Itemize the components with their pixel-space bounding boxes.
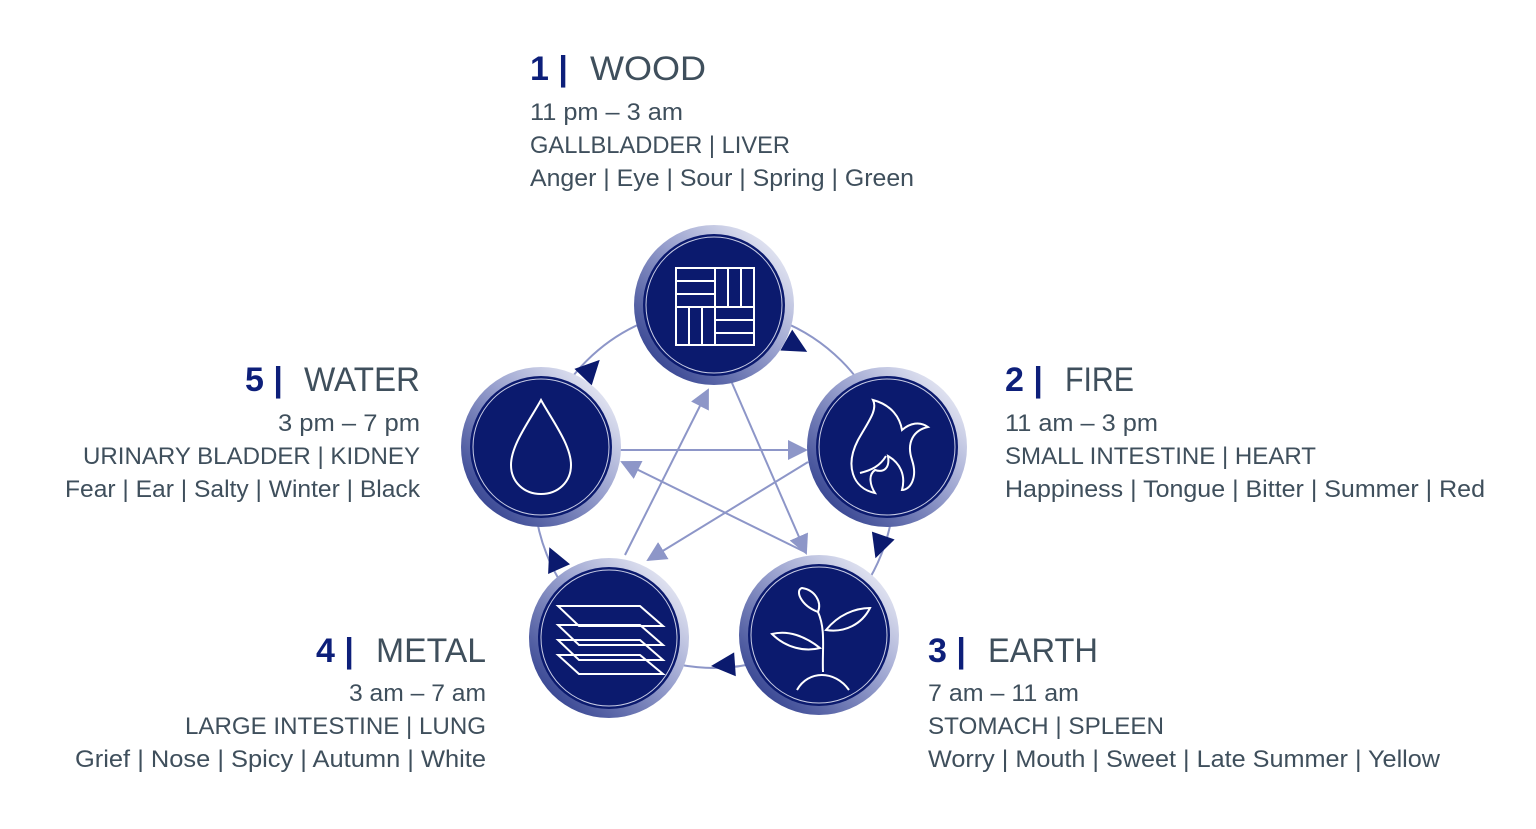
text: fire: 2 | <box>1005 361 1043 399</box>
text: metal <box>75 632 486 773</box>
text: water: 5 | <box>245 361 283 399</box>
text: wood: 1 | <box>530 50 568 88</box>
node: wood <box>634 225 794 385</box>
text: earth: 7 am – 11 am <box>928 680 1079 707</box>
text: metal: 4 | <box>316 632 354 670</box>
text: wood: Anger | Eye | Sour | Spring | Green <box>530 165 914 192</box>
node: earth <box>739 555 899 715</box>
text: metal: Grief | Nose | Spicy | Autumn | White <box>75 746 486 773</box>
node: water <box>461 367 621 527</box>
text: wood: 11 pm – 3 am <box>530 99 683 126</box>
star arrows <box>620 360 808 560</box>
text: earth: Worry | Mouth | Sweet | Late Summer | Yellow <box>928 746 1441 773</box>
text: earth: STOMACH | SPLEEN <box>928 713 1164 740</box>
text: fire: FIRE <box>1065 361 1134 399</box>
node: metal <box>529 558 689 718</box>
text: metal: 3 am – 7 am <box>349 680 486 707</box>
node: fire <box>807 367 967 527</box>
text: earth: 3 | <box>928 632 966 670</box>
text: water: WATER <box>304 361 420 399</box>
text: water: URINARY BLADDER | KIDNEY <box>83 443 420 470</box>
text: wood <box>530 50 914 192</box>
text: metal: METAL <box>376 632 486 670</box>
text: water: Fear | Ear | Salty | Winter | Black <box>65 476 421 503</box>
text: earth <box>928 632 1441 773</box>
text: fire: Happiness | Tongue | Bitter | Summer | Red <box>1005 476 1485 503</box>
text: fire <box>1005 361 1485 503</box>
text: metal: LARGE INTESTINE | LUNG <box>185 713 486 740</box>
text: water: 3 pm – 7 pm <box>278 410 420 437</box>
text: fire: SMALL INTESTINE | HEART <box>1005 443 1316 470</box>
text: wood: GALLBLADDER | LIVER <box>530 132 790 159</box>
text: earth: EARTH <box>988 632 1098 670</box>
cycle ring <box>534 308 895 678</box>
text: water <box>65 361 421 503</box>
text: wood: WOOD <box>590 50 706 88</box>
text: fire: 11 am – 3 pm <box>1005 410 1158 437</box>
